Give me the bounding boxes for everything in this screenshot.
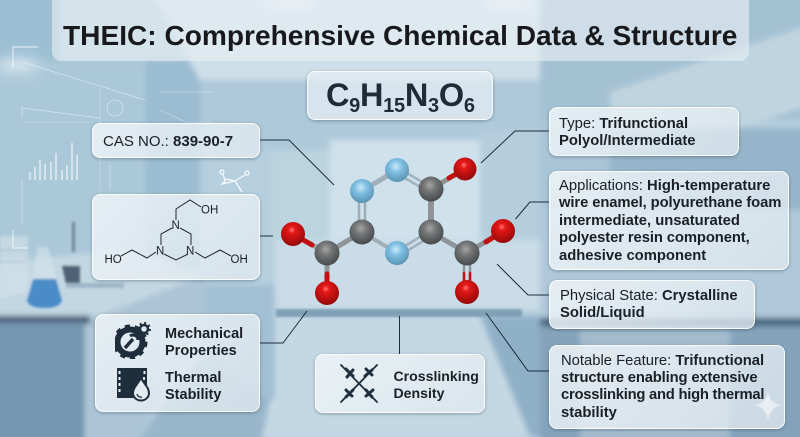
type text: Polyol/Intermediate: [559, 133, 696, 149]
skeletal structure of THEIC: N: [156, 245, 164, 257]
skeletal structure of THEIC: OH: [230, 254, 247, 266]
type text: [559, 116, 696, 149]
crosslinking label: [394, 368, 479, 401]
applications text: adhesive component: [559, 248, 706, 264]
title panel: [52, 0, 749, 61]
notable feature text: [561, 352, 764, 421]
CAS text: CAS NO.: 839-90-7: [103, 132, 233, 150]
notable feature text: structure enabling extensive: [561, 370, 757, 386]
thermal stability label: [165, 370, 222, 403]
notable feature text: stability: [561, 405, 617, 421]
icon: crosslinks: [340, 364, 378, 403]
icon: film strip with drop: [117, 368, 150, 402]
physical state text: Solid/Liquid: [560, 305, 645, 321]
skeletal structure of THEIC: OH: [200, 204, 218, 216]
crosslinking label: Density: [394, 385, 444, 401]
skeletal structure of THEIC: N: [171, 220, 179, 232]
bonds: [293, 168, 503, 293]
crosslinking label: Crosslinking: [394, 368, 479, 384]
applications text: polyester resin component,: [559, 230, 750, 246]
icon: gear with wrench: [115, 322, 151, 359]
applications text: intermediate, unsaturated: [559, 213, 740, 229]
notable feature text: Notable Feature: Trifunctional: [561, 352, 764, 368]
skeletal structure of THEIC: HO: [104, 254, 121, 266]
formula panel: [307, 71, 493, 120]
notable feature text: crosslinking and high thermal: [561, 387, 764, 403]
structural formula panel: [92, 194, 260, 280]
chemical formula: C9H15N3O6: [326, 77, 475, 117]
crosslinking density panel: [315, 354, 485, 413]
thermal stability label: Stability: [165, 387, 221, 403]
thermal stability label: Thermal: [165, 370, 221, 386]
applications text: wire enamel, polyurethane foam: [559, 195, 781, 211]
physical state panel: [549, 280, 755, 329]
title: THEIC: Comprehensive Chemical Data & Structure: [63, 20, 737, 51]
mechanical properties label: Mechanical: [165, 326, 243, 342]
counter band: [276, 309, 522, 317]
physical state text: [560, 288, 738, 321]
atoms: [281, 158, 515, 305]
skeletal structure of THEIC: [104, 199, 247, 266]
notable feature panel: [549, 345, 785, 429]
applications panel: [549, 171, 789, 270]
CAS number panel: [92, 123, 260, 158]
skeletal structure of THEIC: N: [186, 245, 194, 257]
mechanical properties label: Properties: [165, 343, 237, 359]
applications text: [559, 178, 781, 264]
physical state text: Physical State: Crystalline: [560, 288, 738, 304]
mechanical properties label: [165, 326, 243, 359]
applications text: Applications: High-temperature: [559, 178, 770, 194]
mechanical and thermal panel: [95, 314, 260, 412]
type text: Type: Trifunctional: [559, 116, 688, 132]
type panel: [549, 107, 739, 156]
